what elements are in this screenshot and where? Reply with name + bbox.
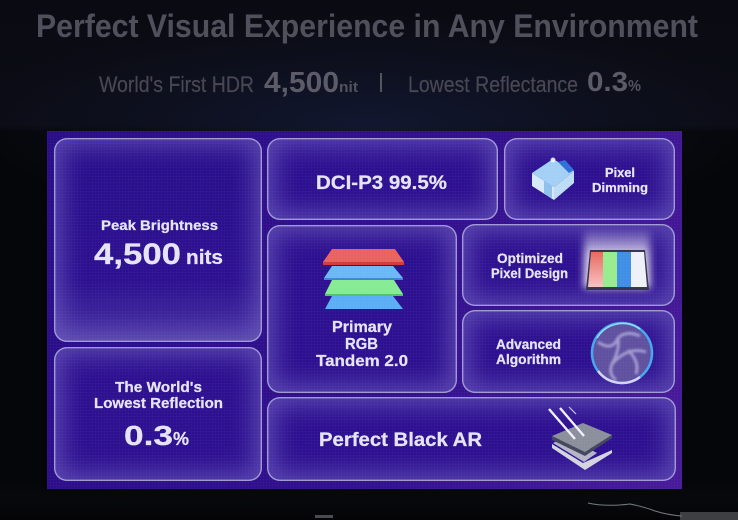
panel: lowest reflection — [54, 347, 262, 481]
screen pixel grid texture — [47, 131, 682, 489]
subtitle: HDR brightness: nit — [339, 79, 358, 96]
subtitle: reflectance: 0.3 — [587, 66, 628, 97]
label: DCI-P3 99.5%: DCI-P3 99.5% — [316, 173, 447, 194]
label: advanced algorithm: Advanced — [496, 337, 561, 352]
subtitle: HDR brightness: World's First HDR — [99, 72, 254, 97]
label: pixel dimming — [592, 165, 648, 195]
panel: advanced algorithm — [462, 310, 675, 393]
label: primary RGB tandem 2.0 — [316, 319, 408, 370]
label: perfect black AR: Perfect Black AR — [319, 429, 482, 451]
label: optimized pixel design: Optimized — [497, 251, 563, 266]
subtitle: HDR brightness — [99, 67, 358, 99]
label: primary RGB tandem 2.0: Primary — [332, 319, 392, 336]
icon: RGBW sub-pixels with glow — [584, 230, 650, 290]
subtitle separator — [380, 73, 382, 92]
TV screen background — [47, 131, 682, 489]
label: pixel dimming: Dimming — [592, 180, 648, 195]
label: optimized pixel design — [491, 251, 568, 281]
label: optimized pixel design: Pixel Design — [491, 266, 568, 281]
panel: primary RGB tandem — [267, 225, 457, 393]
panel: DCI-P3 — [267, 138, 498, 220]
label: primary RGB tandem 2.0: RGB — [345, 336, 378, 353]
value: 4,500 nits: nits — [186, 247, 223, 269]
value: 4,500 nits — [94, 238, 223, 271]
subtitle: reflectance — [408, 66, 641, 97]
value: 0.3%: 0.3 — [124, 420, 173, 451]
icon: glass pixel cube — [532, 158, 574, 200]
header: title and subtitle on the stage backdrop — [36, 8, 698, 99]
subtitle: reflectance: Lowest Reflectance — [408, 72, 578, 97]
label: the world's lowest reflection: The World's — [115, 380, 202, 396]
label: the world's lowest reflection: Lowest Reflection — [94, 396, 223, 412]
label: pixel dimming: Pixel — [605, 165, 635, 180]
icon: reflection layers with light rays — [549, 407, 612, 470]
subtitle: HDR brightness: 4,500 — [264, 67, 339, 99]
label: advanced algorithm: Algorithm — [496, 352, 561, 367]
label: primary RGB tandem 2.0: Tandem 2.0 — [316, 353, 408, 370]
value: 0.3% — [124, 420, 189, 451]
title: Perfect Visual Experience in Any Environment — [36, 8, 698, 44]
icon: stacked RGB layers — [323, 249, 404, 309]
subtitle: reflectance: % — [628, 78, 641, 95]
panel: pixel dimming — [504, 138, 675, 220]
panel: peak brightness — [54, 138, 262, 342]
panel: optimized pixel design — [462, 224, 675, 306]
label: advanced algorithm — [496, 337, 561, 367]
value: 4,500 nits: 4,500 — [94, 238, 181, 271]
label: the world's lowest reflection — [94, 380, 223, 412]
value: 0.3%: % — [173, 429, 189, 449]
label: peak brightness: Peak Brightness — [101, 217, 218, 233]
panel: perfect black AR — [267, 397, 676, 481]
icon: neural sphere — [592, 323, 652, 383]
